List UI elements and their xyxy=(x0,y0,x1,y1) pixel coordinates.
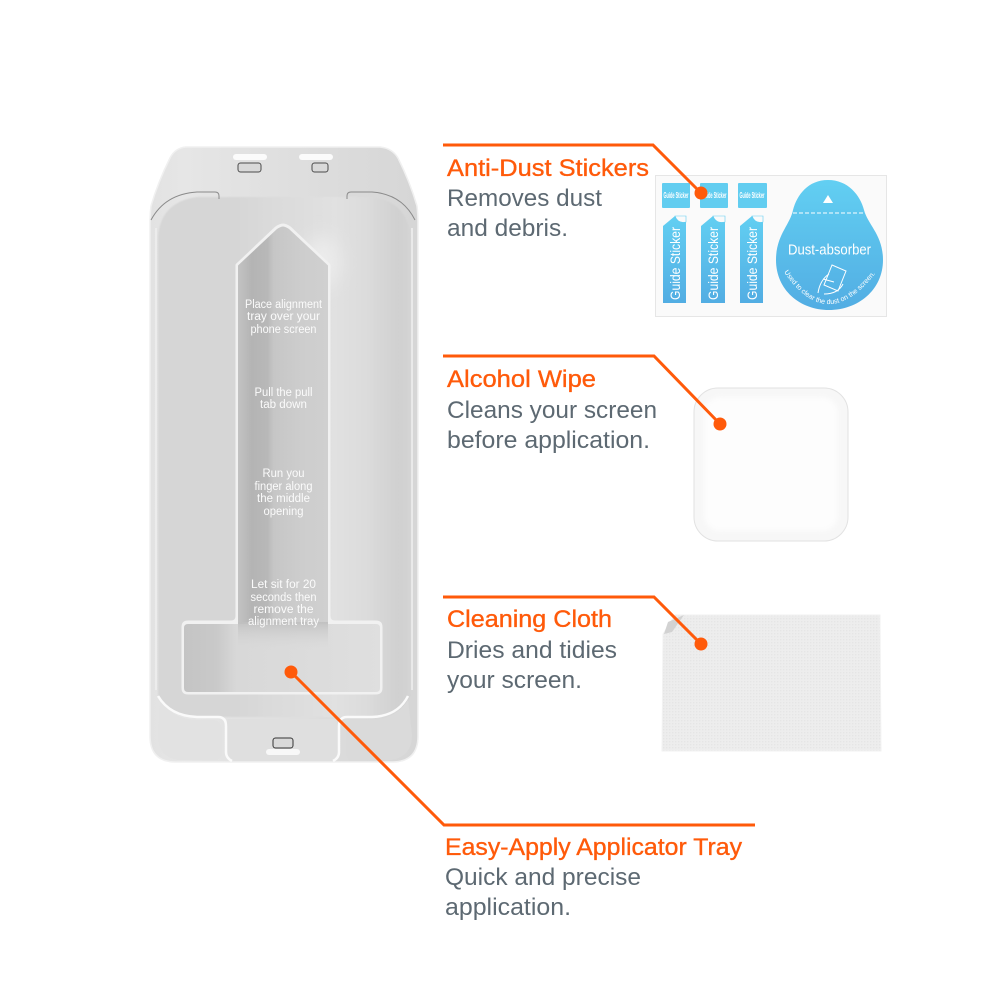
tray instructions: opening xyxy=(264,506,304,518)
anti-dust sticker sheet: Guide Sticker xyxy=(740,191,764,200)
long guide stickers xyxy=(663,216,763,303)
label: anti-dust stickers: Anti-Dust Stickers xyxy=(447,155,649,182)
hand icon xyxy=(818,265,846,294)
bottom white contour xyxy=(158,696,408,761)
anti-dust sticker sheet: Guide Sticker xyxy=(667,227,683,300)
tray instructions: alignment tray xyxy=(248,616,319,628)
alignment base xyxy=(184,624,380,692)
anti-dust sticker sheet: Used to clear the dust on the screen. xyxy=(784,270,875,304)
tray instructions: finger along xyxy=(254,481,312,493)
label: cleaning cloth: Dries and tidies xyxy=(447,637,617,664)
alignment arrow opening xyxy=(183,225,381,693)
dust absorber xyxy=(776,180,883,310)
tray instructions xyxy=(245,299,323,628)
label: alcohol wipe xyxy=(447,366,657,454)
label: alcohol wipe: Alcohol Wipe xyxy=(447,366,596,393)
tray instructions: Let sit for 20 xyxy=(251,579,316,591)
tray instructions: Pull the pull xyxy=(254,387,312,399)
folded corner xyxy=(664,615,684,634)
tray body xyxy=(150,147,418,762)
applicator tray xyxy=(150,147,418,762)
alcohol wipe xyxy=(694,388,848,541)
callout dots xyxy=(284,186,726,678)
tray instructions: tray over your xyxy=(247,311,320,323)
callout lines xyxy=(291,145,755,825)
label: alcohol wipe: before application. xyxy=(447,427,650,454)
label: applicator tray: Easy-Apply Applicator Tray xyxy=(445,834,742,861)
anti-dust sticker sheet: Guide Sticker xyxy=(664,191,688,200)
label: cleaning cloth: Cleaning Cloth xyxy=(447,606,612,633)
label: applicator tray: application. xyxy=(445,894,571,921)
anti-dust sticker sheet: Guide Sticker xyxy=(705,227,721,300)
anti-dust sticker sheet: Guide Sticker xyxy=(702,191,726,200)
arrow stem fill xyxy=(238,226,328,625)
lower left corner panel xyxy=(158,700,222,760)
tray instructions: phone screen xyxy=(250,324,316,336)
label: alcohol wipe: Cleans your screen xyxy=(447,397,657,424)
light reflection xyxy=(304,236,340,288)
tray instructions: Run you xyxy=(262,468,304,480)
tray instructions: seconds then xyxy=(250,592,316,604)
tray instructions: remove the xyxy=(254,604,314,616)
tray instructions: Place alignment xyxy=(245,299,323,311)
tray instructions: tab down xyxy=(260,399,307,411)
cleaning cloth xyxy=(662,615,881,751)
anti-dust sticker sheet xyxy=(655,175,887,317)
anti-dust sticker sheet: Guide Sticker xyxy=(744,227,760,300)
label: applicator tray xyxy=(445,834,742,921)
anti-dust sticker sheet: Dust-absorber xyxy=(788,242,871,258)
bottom slot xyxy=(266,738,300,755)
small guide stickers xyxy=(662,183,767,208)
tray recess xyxy=(158,197,411,717)
stem-to-base transition xyxy=(238,622,328,650)
tray recess outlines xyxy=(151,192,415,690)
lower right corner panel xyxy=(346,700,412,760)
label: cleaning cloth xyxy=(447,606,617,694)
label: applicator tray: Quick and precise xyxy=(445,864,641,891)
bottom tab xyxy=(227,719,338,761)
sheet xyxy=(656,176,886,316)
tray instructions: the middle xyxy=(257,493,310,505)
label: anti-dust stickers: and debris. xyxy=(447,215,568,242)
top slots xyxy=(233,154,333,172)
label: anti-dust stickers xyxy=(447,155,649,242)
label: anti-dust stickers: Removes dust xyxy=(447,185,602,212)
sticker curls xyxy=(675,216,763,222)
label: cleaning cloth: your screen. xyxy=(447,667,582,694)
